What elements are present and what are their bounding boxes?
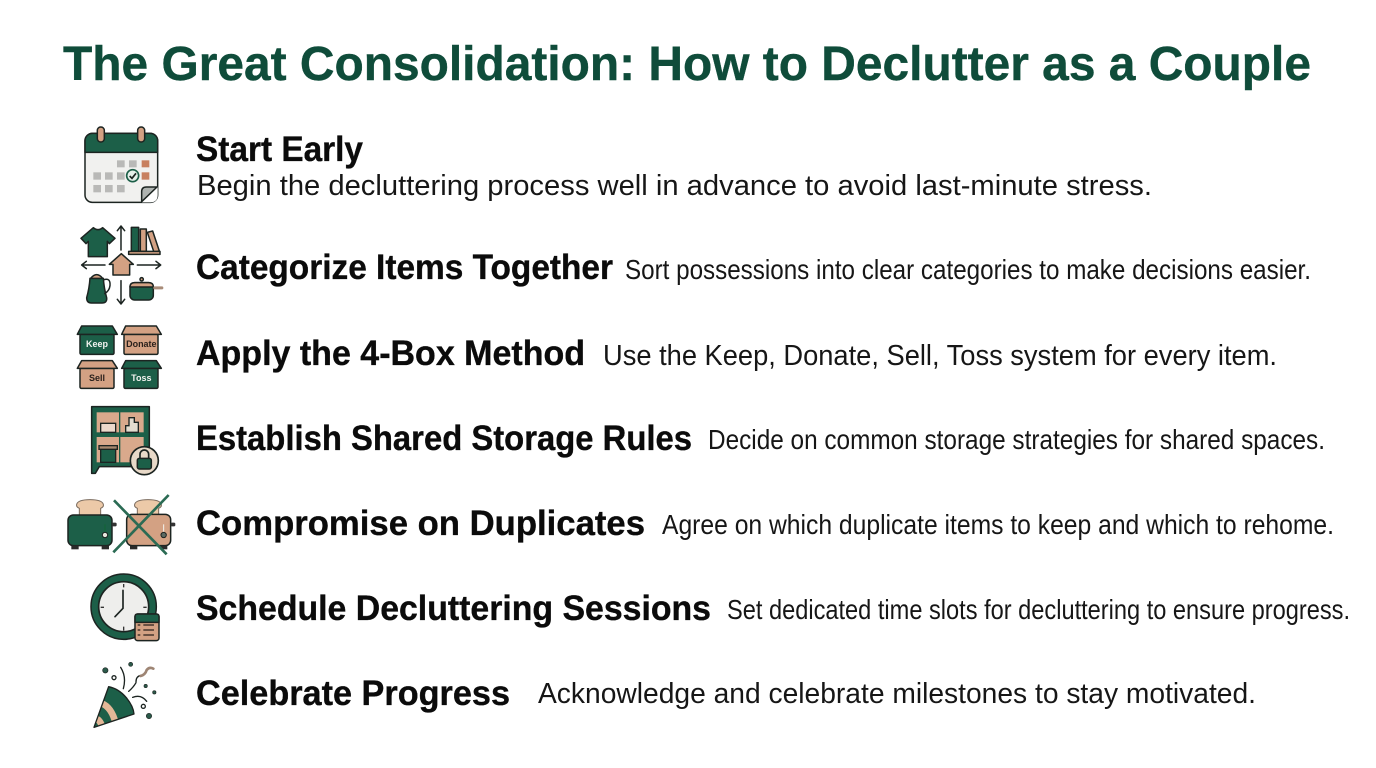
- item: storage rules: [92, 407, 1325, 475]
- icon: clock with notepad: [91, 574, 159, 641]
- title: The Great Consolidation: How to Declutter as a Couple: [63, 38, 1311, 91]
- heading: sessions: Schedule Decluttering Sessions: [196, 589, 711, 628]
- icon: party popper: [94, 662, 156, 727]
- heading: categorize: Categorize Items Together: [196, 248, 613, 287]
- item: sessions: [91, 574, 1350, 641]
- item: duplicates: [68, 495, 1334, 554]
- heading: celebrate: Celebrate Progress: [196, 674, 510, 713]
- icon: locked shelf: [92, 407, 158, 475]
- description: 4-box method: Use the Keep, Donate, Sell, Toss system for every item.: [603, 340, 1277, 372]
- item: start early: [85, 127, 1152, 202]
- icon: four boxes: Sell: [89, 373, 105, 383]
- icon: calendar: [85, 127, 158, 202]
- description: celebrate: Acknowledge and celebrate milestones to stay motivated.: [538, 678, 1256, 710]
- item: 4-box method: [77, 326, 1277, 388]
- heading: start early: Start Early: [196, 130, 364, 169]
- heading: duplicates: Compromise on Duplicates: [196, 504, 645, 543]
- item: categorize: [81, 226, 1311, 304]
- description: start early: Begin the decluttering process well in advance to avoid last-minute stress.: [197, 170, 1152, 202]
- icon: four boxes: [77, 326, 161, 388]
- heading: 4-box method: Apply the 4-Box Method: [196, 334, 585, 373]
- icon: four boxes: Keep: [86, 339, 108, 349]
- icon: categories: [81, 226, 163, 304]
- icon: four boxes: Toss: [131, 373, 151, 383]
- heading: storage rules: Establish Shared Storage Rules: [196, 419, 692, 458]
- icon: two toasters: [68, 495, 175, 554]
- item: celebrate: [94, 662, 1256, 727]
- icon: four boxes: Donate: [126, 339, 157, 349]
